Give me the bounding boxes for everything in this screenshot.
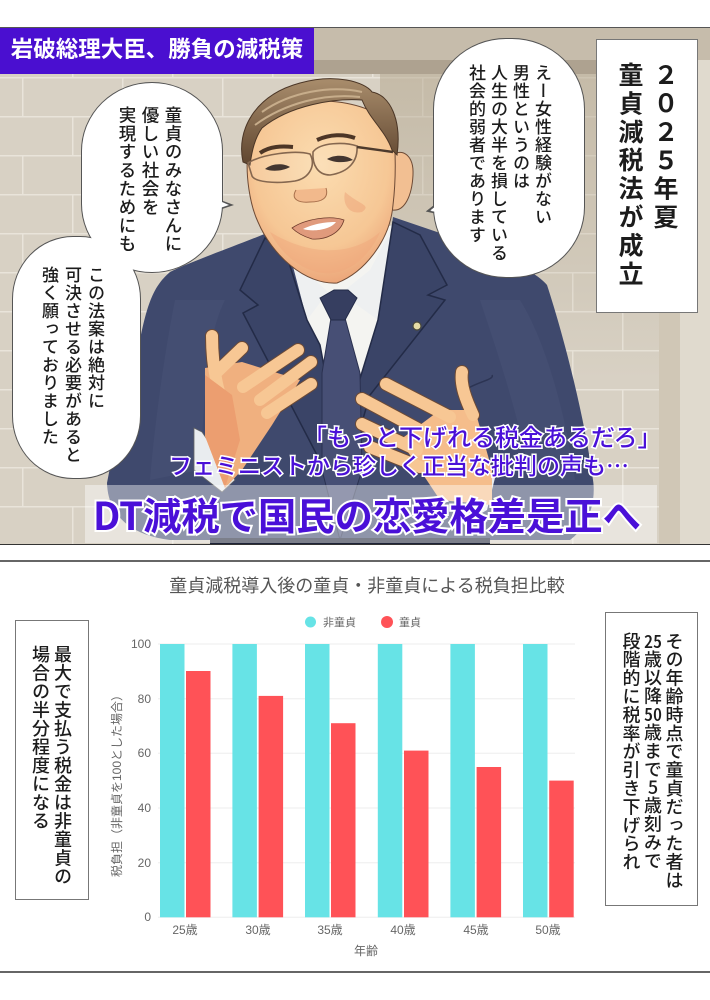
glasses: [248, 144, 393, 182]
panel: bottom chart section: [0, 560, 710, 973]
y axis labels: 20: [138, 856, 151, 870]
speech bubble text: right: [465, 64, 556, 262]
note text: left: [28, 645, 76, 886]
speech bubble text: right: 男性というのは: [509, 64, 534, 190]
shirt and collar: [290, 225, 392, 395]
note text: right: 25 歳以降 50 歳まで 5 歳刻みで: [640, 632, 666, 870]
right cuff: [470, 470, 497, 520]
x axis labels: [172, 923, 561, 937]
speech bubble text: center left: [115, 106, 186, 253]
x axis labels: 50歳: [535, 923, 561, 937]
caption: quote: 「もっと下げれる税金あるだろ」: [303, 418, 662, 453]
x axis labels: 25歳: [172, 923, 198, 937]
legend: 非童貞: [323, 616, 356, 629]
bar chart: tax burden comparison: [110, 576, 575, 958]
note text: right: その年齢時点で童貞だった者は: [662, 632, 688, 890]
speech bubble text: center left: 実現するためにも: [115, 106, 140, 253]
x axis labels: 35歳: [317, 923, 343, 937]
headline: DT減税で国民の恋愛格差是正へ: [93, 487, 641, 542]
right hand: [362, 372, 492, 505]
lapel pin: [413, 322, 421, 330]
y axis labels: 60: [138, 746, 151, 760]
jacket hem shadow: [210, 538, 490, 545]
speech bubble text: lower left: 強く願っておりました: [38, 266, 63, 446]
x axis labels: 30歳: [245, 923, 271, 937]
left cuff: [194, 428, 235, 492]
left hand: [205, 336, 311, 488]
speech bubble text: lower left: この法案は絶対に: [84, 266, 109, 410]
speech bubble text: lower left: 可決させる必要があると: [61, 266, 86, 464]
note text: right: 段階的に税率が引き下げられ: [618, 632, 644, 871]
y axis labels: 40: [138, 801, 151, 815]
speech bubble text: center left: 優しい社会を: [138, 106, 163, 216]
x axis title: 年齢: [354, 944, 378, 958]
y axis labels: [131, 637, 151, 924]
title text: ２０２５年夏: [648, 62, 684, 232]
x axis labels: 40歳: [390, 923, 416, 937]
y axis labels: 80: [138, 692, 151, 706]
gridlines: [158, 644, 575, 917]
note text: right: [618, 632, 688, 890]
speech bubble text: right: 社会的弱者であります: [465, 64, 490, 244]
title box: 2025 summer law passed: [596, 39, 698, 313]
legend: [305, 616, 421, 629]
mouth: [292, 218, 344, 239]
y axis labels: 100: [131, 637, 151, 651]
note box: right: [605, 612, 698, 906]
speech bubble outlines: [13, 39, 584, 478]
speech bubble text: right: えー女性経験がない: [531, 64, 556, 226]
ear: [392, 152, 413, 210]
non-virgin bars: [160, 644, 548, 917]
nose: [294, 188, 327, 202]
illustration: politician gesturing in front of a tiled wall: [0, 28, 710, 544]
title text: [613, 62, 684, 289]
speech bubble text: center left: 童貞のみなさんに: [161, 106, 186, 253]
speech bubble fills: [13, 39, 584, 478]
speech bubble text: right: 人生の大半を損している: [487, 64, 512, 262]
note text: left: 最大で支払う税金は非童貞の: [50, 645, 76, 886]
tie: [320, 290, 362, 540]
eyes: [265, 164, 290, 171]
face: [247, 101, 395, 283]
caption: criticism: フェミニストから珍しく正当な批判の声も…: [169, 447, 629, 481]
banner heading: 岩破総理大臣、勝負の減税策: [11, 37, 303, 62]
x axis labels: 45歳: [463, 923, 489, 937]
virgin bars: [186, 671, 574, 917]
lapels: [240, 238, 345, 480]
hair: [242, 79, 398, 165]
speech bubble text: lower left: [38, 266, 109, 464]
y axis title: 税負担（非童貞を100とした場合）: [110, 689, 124, 877]
eyebrows: [260, 147, 293, 153]
note text: left: 場合の半分程度になる: [28, 645, 54, 830]
headline band: [85, 485, 657, 543]
note box: left: [15, 620, 89, 900]
y axis labels: 0: [144, 910, 151, 924]
banner heading: [0, 28, 314, 74]
title text: 童貞減税法が成立: [613, 62, 649, 289]
chart title: 童貞減税導入後の童貞・非童貞による税負担比較: [169, 576, 565, 596]
jacket: [107, 217, 594, 540]
panel: manga scene: [0, 27, 710, 545]
legend: 童貞: [399, 616, 421, 629]
